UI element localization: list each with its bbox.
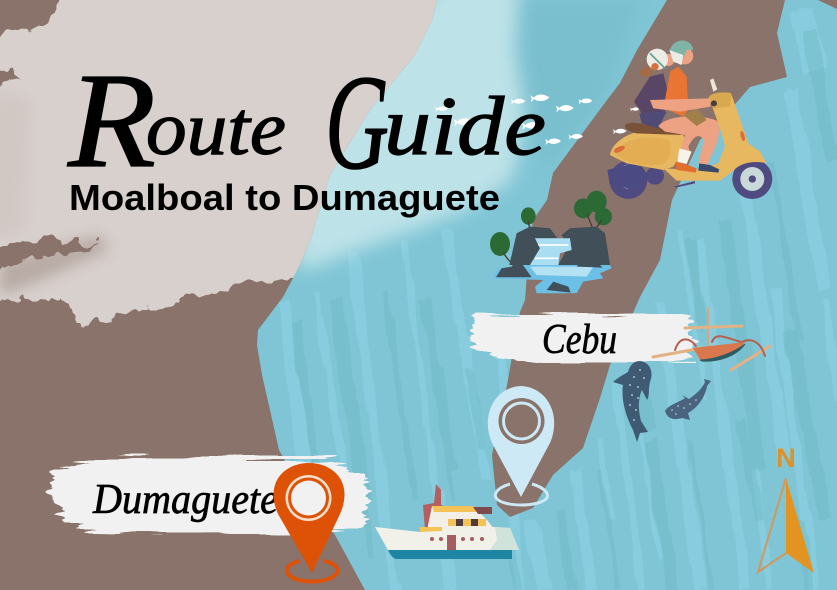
pool [493,265,612,293]
illustration: ferry [375,484,519,559]
rear reflector [613,144,626,154]
map pin: Cebu [488,386,554,505]
window band [420,519,486,533]
map pin: Dumaguete [274,463,344,582]
waterline [388,550,512,559]
midstream rock [547,282,571,293]
hull [375,527,519,550]
sun deck band [432,506,478,512]
upper deck [425,506,495,540]
front wheel [732,159,772,199]
hull shade [490,527,519,550]
title: oute [146,87,286,171]
falls [530,238,572,265]
kickstand [673,181,695,187]
rear rider [634,49,674,128]
label: Dumaguete [50,457,368,534]
place name: Cebu [542,317,617,363]
land: Cebu island [492,0,787,517]
brush stroke [472,312,692,363]
tree trunks [503,213,602,262]
shield light [739,130,746,142]
title: G [325,48,389,198]
bank rocks [496,262,532,277]
place name: Dumaguete [92,477,278,523]
letter N: N [776,443,796,473]
mirror [710,78,717,92]
illustration: whale shark 1 [613,361,652,442]
pool highlight [530,267,593,277]
illustration: outrigger boat [653,308,770,370]
brush stroke [50,457,368,534]
title: uide [384,80,546,173]
scooter body [610,92,767,181]
school of fish [435,94,640,145]
title [67,46,546,198]
label: Cebu [472,312,692,363]
seat [625,123,682,135]
compass: north arrow [758,443,814,573]
trees [490,191,612,256]
arrow [786,478,814,573]
paint edge bottom left [0,235,110,296]
subtitle: Moalboal to Dumaguete [69,177,500,218]
front rider [650,40,719,173]
right stones [577,258,603,268]
land: northeast corner [818,0,837,9]
door and portholes [430,535,484,550]
illustration: whale shark 2 [665,379,711,420]
splash of pale paint on the sea [290,0,526,272]
funnel stripes [473,507,492,514]
illustration: waterfall [490,191,612,293]
land: Negros island [0,0,437,590]
rocks [509,227,610,265]
funnel [423,484,447,530]
illustration: scooter and riders [607,40,772,199]
mottled paint edge [0,102,21,226]
title: R [67,46,156,196]
darker water at the top of the strait [510,0,640,170]
handle grip [711,100,717,106]
paint wash over land [0,0,470,328]
rear wheel [607,161,664,199]
